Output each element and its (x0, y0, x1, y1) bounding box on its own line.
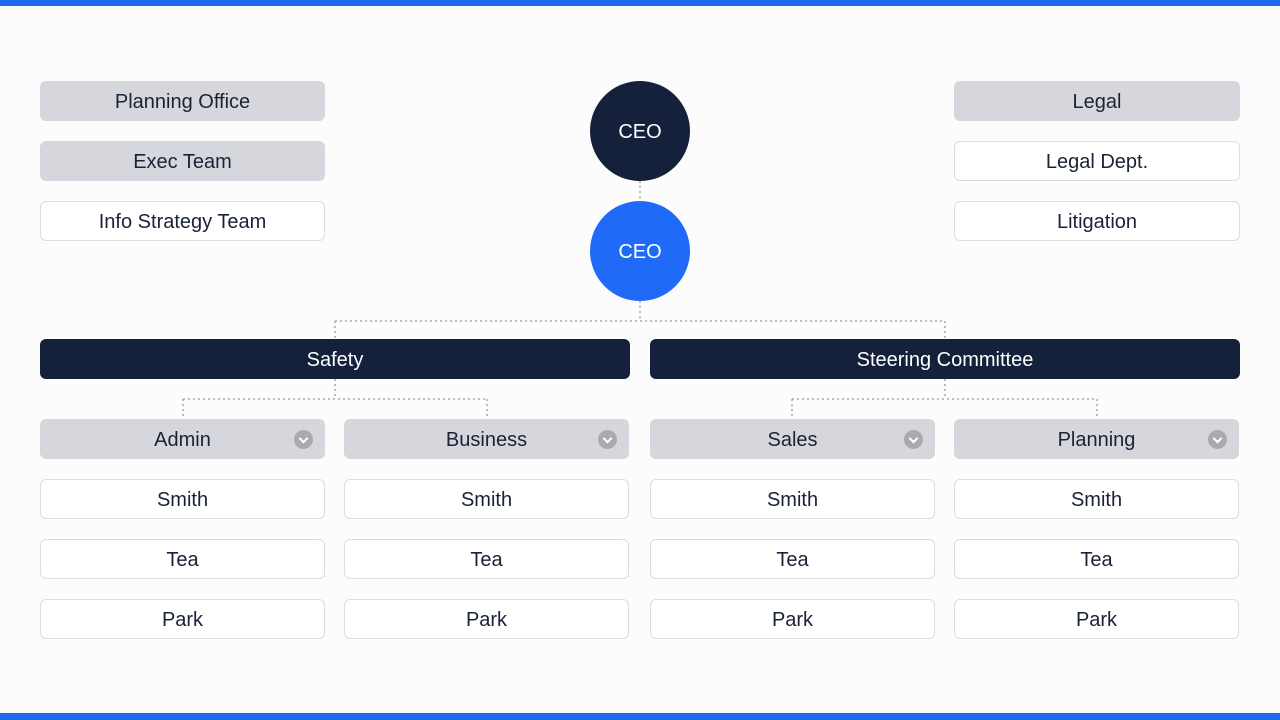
left: Planning Office (40, 81, 325, 121)
column: Admin (40, 419, 325, 639)
column: Business: Tea (470, 548, 503, 570)
right: Litigation: Litigation (1057, 210, 1137, 232)
CEO circle dark (590, 81, 690, 181)
column: Planning (954, 419, 1239, 639)
left: Exec Team (40, 141, 325, 181)
column: Sales: Smith (767, 488, 818, 510)
column: Planning: Park (1076, 608, 1117, 630)
CEO circle dark: CEO (618, 120, 662, 142)
column: Business (344, 419, 629, 639)
right: Legal Dept. (954, 141, 1240, 181)
column: Sales (650, 419, 935, 639)
column: Sales: Tea (776, 548, 809, 570)
column: Business: Park (466, 608, 507, 630)
column: Admin: Tea (166, 548, 199, 570)
left: Planning Office: Planning Office (115, 90, 250, 112)
column: Planning: Tea (1080, 548, 1113, 570)
CEO circle blue (590, 201, 690, 301)
right: Legal Dept.: Legal Dept. (1046, 150, 1148, 172)
top bar (0, 0, 1280, 6)
header: Steering Committee (650, 339, 1240, 379)
header: Safety: Safety (307, 348, 363, 370)
right: Legal: Legal (1073, 90, 1121, 112)
column: Planning: Planning (1058, 428, 1135, 450)
right: Litigation (954, 201, 1240, 241)
column: Admin: Admin (154, 428, 211, 450)
CEO circle blue: CEO (618, 240, 662, 262)
right: Legal (954, 81, 1240, 121)
column: Planning: Smith (1071, 488, 1122, 510)
bottom bar (0, 713, 1280, 720)
column: Sales: Park (772, 608, 813, 630)
left: Info Strategy Team (40, 201, 325, 241)
column: Admin: Park (162, 608, 203, 630)
left: Info Strategy Team: Info Strategy Team (99, 210, 266, 232)
column: Sales: Sales (767, 428, 818, 450)
column: Business: Business (446, 428, 527, 450)
column: Business: Smith (461, 488, 512, 510)
left: Exec Team: Exec Team (133, 150, 232, 172)
header: Steering Committee: Steering Committee (857, 348, 1033, 370)
column: Admin: Smith (157, 488, 208, 510)
header: Safety (40, 339, 630, 379)
